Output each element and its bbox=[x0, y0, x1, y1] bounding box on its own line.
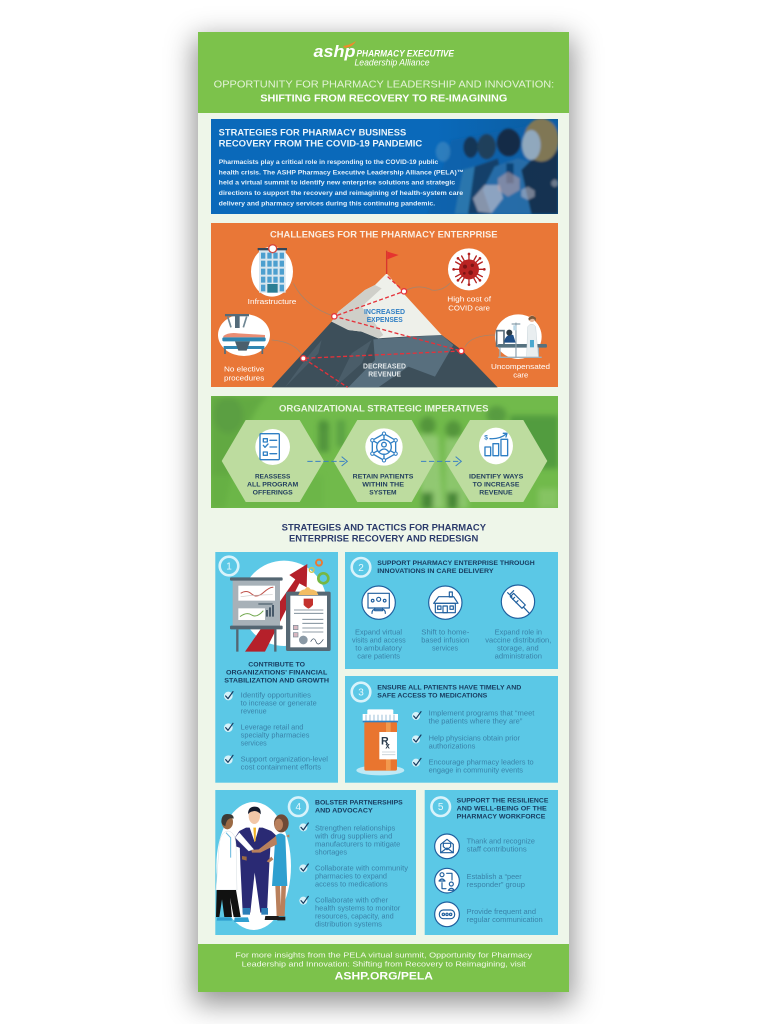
strategy 3 heading: ENSURE ALL PATIENTS HAVE TIMELY AND bbox=[377, 684, 521, 691]
strategy 3 checklist: Encourage pharmacy leaders to bbox=[429, 759, 534, 766]
icon: revenue growth: $ bbox=[484, 435, 488, 442]
strategy 5 text: recognize: staff contributions bbox=[467, 847, 527, 854]
strategy 2 text: vaccine: vaccine distribution, bbox=[485, 637, 551, 644]
panel: strategy 1 bbox=[215, 552, 338, 783]
number 1: 1 bbox=[226, 562, 232, 572]
background photo bbox=[210, 396, 558, 509]
strategy 5 text: recognize bbox=[467, 839, 535, 854]
strategy 5 heading: SUPPORT THE RESILIENCE bbox=[457, 798, 549, 805]
strategy 5 text: communication bbox=[467, 909, 543, 924]
icon: hospital bbox=[251, 245, 293, 297]
mountain illustration bbox=[272, 251, 498, 387]
hexagon: reassess bbox=[222, 420, 324, 502]
panel: strategy 2 bbox=[345, 552, 558, 669]
strategy 2 heading bbox=[377, 560, 535, 575]
high cost label: COVID care bbox=[448, 304, 490, 313]
strategy 1 checklist: revenue bbox=[241, 709, 267, 716]
mountain labels: INCREASED bbox=[364, 309, 405, 316]
strategy 5 text: peer: Establish a “peer bbox=[467, 874, 522, 881]
footer band bbox=[198, 944, 569, 992]
banner photo of summit attendees bbox=[428, 118, 559, 214]
strategy 3 heading: SAFE ACCESS TO MEDICATIONS bbox=[377, 692, 488, 699]
no elective label: procedures bbox=[224, 374, 265, 383]
icon: peer responder bbox=[435, 868, 459, 893]
identify label: TO INCREASE bbox=[473, 481, 520, 488]
header band bbox=[198, 32, 569, 113]
strategy 1 checklist: services bbox=[241, 741, 267, 748]
logo: PHARMACY EXECUTIVE bbox=[356, 48, 455, 60]
strategy 4 heading: BOLSTER PARTNERSHIPS bbox=[315, 799, 403, 806]
panel: strategy 5 bbox=[425, 790, 558, 935]
strategy 3 checklist bbox=[412, 711, 534, 774]
strategy 4 checklist bbox=[299, 823, 409, 929]
retain label: RETAIN PATIENTS bbox=[353, 473, 414, 480]
number 2 bbox=[352, 558, 370, 577]
icon: surgery bbox=[218, 314, 270, 356]
strategy 4 checklist: Strengthen relationships bbox=[315, 825, 396, 832]
number 3 bbox=[352, 683, 370, 701]
banner heading bbox=[219, 128, 423, 149]
number 3: 3 bbox=[358, 688, 364, 698]
infrastructure label: Infrastructure bbox=[248, 297, 296, 306]
retain label: WITHIN THE bbox=[362, 481, 404, 488]
imperatives heading: ORGANIZATIONAL STRATEGIC IMPERATIVES bbox=[279, 403, 489, 413]
strategy 2 text: virtual: to ambulatory bbox=[355, 645, 403, 652]
strategy 4 heading bbox=[315, 799, 403, 814]
mountain labels: REVENUE bbox=[368, 372, 401, 379]
banner body text: delivery and pharmacy services during this continuing pandemic. bbox=[219, 200, 435, 207]
banner heading: STRATEGIES FOR PHARMACY BUSINESS bbox=[219, 128, 406, 138]
strategy 1 checklist: cost containment efforts bbox=[241, 765, 322, 772]
strategy 3 checklist: the patients where they are” bbox=[429, 719, 523, 726]
logo: Leadership Alliance bbox=[354, 58, 430, 68]
strategy 4 checklist: access to medications bbox=[315, 882, 388, 889]
mountain labels: EXPENSES bbox=[367, 317, 403, 324]
strategy 1 heading: ORGANIZATIONS' FINANCIAL bbox=[226, 669, 327, 676]
footer text: Leadership and Innovation: Shifting from Recovery to Reimagining, visit bbox=[242, 960, 527, 969]
strategy 2 text: virtual bbox=[352, 629, 406, 660]
number 5 bbox=[431, 797, 450, 816]
identify label bbox=[469, 473, 524, 496]
strategy 3 checklist: authorizations bbox=[429, 743, 476, 750]
strategy 2 text: home: Shift to home- bbox=[421, 629, 469, 636]
footer text bbox=[235, 950, 532, 969]
number 2: 2 bbox=[358, 563, 364, 574]
strategy 2 text: virtual: care patients bbox=[357, 653, 401, 660]
number 5: 5 bbox=[438, 802, 444, 813]
main title bbox=[214, 79, 554, 104]
panel: intro banner bbox=[211, 118, 559, 214]
high cost label bbox=[447, 295, 492, 313]
reassess label: OFFERINGS bbox=[253, 489, 293, 496]
icon: recognition envelope bbox=[435, 834, 459, 859]
strategy 3 checklist: Help physicians obtain prior bbox=[429, 735, 521, 742]
strategy 4 checklist: manufacturers to mitigate bbox=[315, 841, 400, 848]
strategy 5 text: communication: Provide frequent and bbox=[467, 909, 536, 916]
heading: strategies and tactics bbox=[282, 523, 486, 544]
strategy 4 checklist: resources, capacity, and bbox=[315, 914, 394, 921]
reassess label: REASSESS bbox=[255, 473, 291, 480]
strategy 2 text: home bbox=[421, 629, 469, 652]
strategy 1 checklist: specialty pharmacies bbox=[241, 733, 310, 740]
identify label: REVENUE bbox=[479, 489, 513, 496]
banner body text: held a virtual summit to identify new enterprise solutions and strategic bbox=[219, 180, 455, 187]
strategy 1 heading: STABILIZATION AND GROWTH bbox=[224, 677, 329, 684]
icon: checklist bbox=[255, 429, 290, 465]
reassess label: ALL PROGRAM bbox=[247, 481, 299, 488]
no elective label: No elective bbox=[224, 365, 264, 374]
reassess label bbox=[247, 473, 299, 496]
strategy 5 heading: AND WELL-BEING OF THE bbox=[457, 806, 547, 813]
strategy 2 heading: INNOVATIONS IN CARE DELIVERY bbox=[377, 568, 494, 575]
high cost label: High cost of bbox=[447, 295, 492, 304]
panel: strategy 4 bbox=[215, 790, 416, 935]
icon: prescription bottle: x bbox=[385, 742, 390, 751]
icon: home infusion bbox=[429, 586, 462, 619]
strategy 5 text: recognize: Thank and recognize bbox=[467, 839, 535, 846]
strategy 2 text: home: services bbox=[432, 645, 459, 652]
strategy 5 text: peer: responder” group bbox=[467, 882, 525, 889]
arrow: reassess to retain bbox=[307, 457, 347, 466]
strategy 4 heading: AND ADVOCACY bbox=[315, 807, 373, 814]
panel: challenges bbox=[211, 223, 558, 387]
strategy 4 checklist: Collaborate with community bbox=[315, 866, 409, 873]
footer text: For more insights from the PELA virtual summit, Opportunity for Pharmacy bbox=[235, 950, 532, 959]
banner body text: health crisis. The ASHP Pharmacy Executive Leadership Alliance (PELA)™ bbox=[219, 169, 464, 176]
banner body text bbox=[219, 159, 464, 207]
icon: prescription bottle bbox=[356, 709, 404, 775]
mountain labels: DECREASED bbox=[363, 364, 406, 371]
strategy 5 heading: PHARMACY WORKFORCE bbox=[457, 814, 546, 821]
number 4 bbox=[289, 797, 308, 816]
strategy 2 text: vaccine bbox=[485, 629, 551, 660]
strategy 4 checklist: pharmacies to expand bbox=[315, 874, 387, 881]
banner body text: Pharmacists play a critical role in responding to the COVID-19 public bbox=[219, 159, 438, 166]
uncompensated label: Uncompensated bbox=[491, 362, 550, 371]
hexagon: retain bbox=[333, 420, 435, 502]
logo: ashp bbox=[314, 42, 356, 61]
strategy 4 checklist: shortages bbox=[315, 849, 348, 856]
strategy 1 checklist: Identify opportunities bbox=[241, 693, 312, 700]
strategy 2 text: home: based infusion bbox=[421, 637, 469, 644]
icon: prescription bottle: R bbox=[381, 736, 389, 748]
strategy 5 heading bbox=[457, 798, 549, 821]
strategy 1 checklist: to increase or generate bbox=[241, 701, 317, 708]
panel: strategy 3 bbox=[345, 676, 558, 783]
uncompensated label bbox=[491, 362, 550, 380]
main title: OPPORTUNITY FOR PHARMACY LEADERSHIP AND INNOVATION: bbox=[214, 79, 554, 90]
banner body text: directions to support the recovery and reimagining of health-system care bbox=[219, 190, 463, 197]
hexagon: identify bbox=[445, 420, 547, 502]
retain label bbox=[353, 473, 414, 496]
strategy 2 text: vaccine: storage, and bbox=[497, 645, 539, 652]
strategy 2 text: vaccine: administration bbox=[495, 653, 542, 660]
number 1 bbox=[220, 557, 238, 575]
illustration: partnership bbox=[216, 802, 291, 930]
icon: vaccine syringe bbox=[501, 585, 535, 618]
strategy 5 text: peer bbox=[467, 874, 525, 889]
main title: SHIFTING FROM RECOVERY TO RE-IMAGINING bbox=[260, 93, 507, 104]
strategy 2 heading: SUPPORT PHARMACY ENTERPRISE THROUGH bbox=[377, 560, 535, 567]
strategy 1 heading bbox=[224, 661, 329, 684]
strategy 4 checklist: health systems to monitor bbox=[315, 906, 401, 913]
strategy 3 checklist: engage in community events bbox=[429, 767, 524, 774]
heading: strategies and tactics: ENTERPRISE RECOVERY AND REDESIGN bbox=[289, 534, 479, 544]
identify label: IDENTIFY WAYS bbox=[469, 473, 524, 480]
icon: virus bbox=[448, 248, 490, 290]
no elective label bbox=[224, 365, 265, 383]
strategy 2 text: virtual: visits and access bbox=[352, 637, 406, 644]
strategy 1 heading: CONTRIBUTE TO bbox=[248, 661, 305, 668]
logo bbox=[314, 41, 455, 68]
strategy 4 checklist: distribution systems bbox=[315, 922, 383, 929]
strategy 1 checklist: Leverage retail and bbox=[241, 725, 304, 732]
strategy 1 checklist: Support organization-level bbox=[241, 757, 329, 764]
panel: strategic imperatives bbox=[210, 396, 558, 509]
mountain labels bbox=[363, 309, 406, 379]
strategy 2 text: virtual: Expand virtual bbox=[355, 629, 402, 636]
icon: patient network bbox=[365, 428, 403, 466]
uncompensated label: care bbox=[513, 371, 528, 380]
icon: virtual visits bbox=[362, 586, 395, 619]
icon: hospital bed with nurse bbox=[495, 314, 547, 359]
strategy 1 checklist bbox=[224, 692, 329, 772]
heading: strategies and tactics: STRATEGIES AND TACTICS FOR PHARMACY bbox=[282, 523, 486, 533]
poster background bbox=[198, 32, 569, 992]
arrow: retain to identify bbox=[421, 457, 461, 466]
strategy 5 text: communication: regular communication bbox=[467, 917, 543, 924]
challenges heading: CHALLENGES FOR THE PHARMACY ENTERPRISE bbox=[270, 229, 498, 239]
illustration: financial growth bbox=[230, 560, 331, 652]
icon: communication bubble bbox=[435, 902, 459, 927]
strategy 3 heading bbox=[377, 684, 521, 699]
strategy 3 checklist: Implement programs that “meet bbox=[429, 711, 534, 718]
strategy 4 checklist: Collaborate with other bbox=[315, 898, 389, 905]
footer link: ASHP.ORG/PELA bbox=[335, 971, 433, 983]
strategy 2 text: vaccine: Expand role in bbox=[495, 629, 542, 636]
strategy 4 checklist: with drug suppliers and bbox=[314, 833, 392, 840]
banner heading: RECOVERY FROM THE COVID-19 PANDEMIC bbox=[219, 139, 423, 149]
number 4: 4 bbox=[296, 802, 302, 813]
retain label: SYSTEM bbox=[369, 489, 397, 496]
